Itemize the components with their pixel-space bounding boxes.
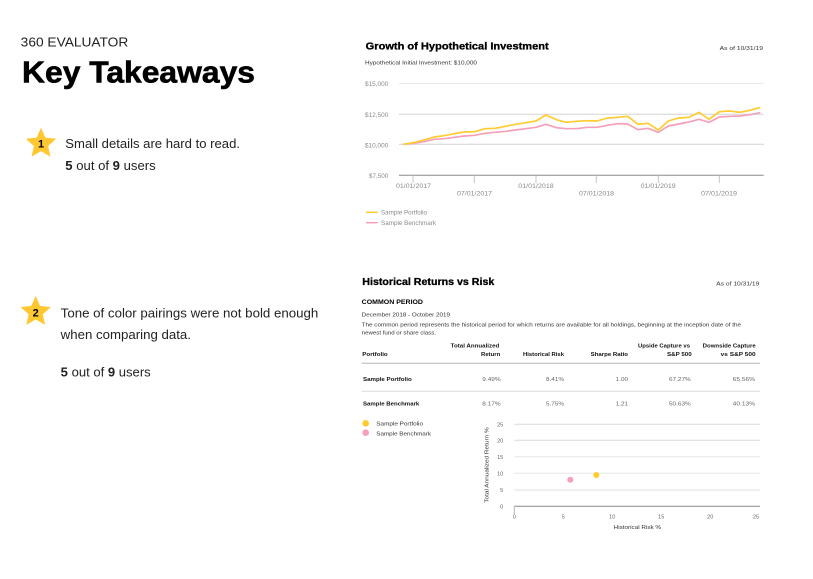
table header: Total Annualized [451,344,500,350]
x axis labels: 01/01/2017 [396,184,432,190]
scatter legend [362,420,431,437]
date range: December 2018 - October 2019 [362,313,450,319]
y axis labels [365,82,389,180]
panel: historical returns vs risk [362,277,760,531]
table row: sample portfolio: 65.56% [733,377,755,383]
y axis tick labels: 15 [497,455,503,461]
x axis labels: 07/01/2018 [579,192,615,198]
table header: vs S&P 500 [721,352,756,358]
x axis labels: 01/01/2018 [518,184,554,190]
data point: sample portfolio [593,472,599,478]
takeaway 1 [26,128,240,173]
table header: Downside Capture [703,344,756,350]
y axis labels: $15,000 [365,82,389,88]
takeaway 2 text: when comparing data. [60,327,191,342]
y axis tick labels: 25 [497,422,503,428]
chart legend [366,211,437,227]
takeaway 1 text: Small details are hard to read. [65,136,240,151]
table row: sample benchmark: 40.13% [733,402,755,408]
y axis tick labels: 10 [497,472,503,478]
table row: sample portfolio: Sample Portfolio [363,377,412,383]
table row: sample benchmark: 50.63% [669,402,691,408]
eyebrow label: 360 EVALUATOR [21,35,128,50]
x axis tick labels: 10 [609,514,615,520]
table header: Portfolio [362,352,388,358]
table row: sample portfolio: 67.27% [669,377,691,383]
data table [362,344,760,408]
x axis tick labels [513,514,759,520]
icon: star 1 [26,128,56,157]
as-of date: As of 10/31/19 [716,281,759,287]
table row: sample benchmark: Sample Benchmark [363,402,420,408]
table header: Historical Risk [523,352,565,358]
table row: sample portfolio: 9.49% [482,377,501,383]
y axis labels: $7,500 [369,174,389,180]
x axis tick labels: 5 [562,514,565,520]
x axis tick labels: 0 [513,514,516,520]
table row: sample benchmark: 1.21 [616,402,628,408]
y axis tick labels: 20 [497,438,503,444]
takeaway 2 text: Tone of color pairings were not bold enough [61,305,318,320]
data point: sample benchmark [567,477,573,483]
section heading: COMMON PERIOD [362,299,423,306]
x axis labels: 07/01/2017 [457,192,493,198]
x axis tick labels: 20 [707,514,713,520]
takeaway 2 [20,296,322,380]
y axis title: Total Annualized Return % [485,427,491,503]
title: Key Takeaways [22,54,255,89]
x axis labels [396,184,738,198]
takeaway 1 stat: 5 out of 9 users [65,158,156,173]
x axis labels: 01/01/2019 [641,184,676,190]
chart legend: Sample Portfolio [381,211,428,217]
table header: Sharpe Ratio [591,352,629,358]
takeaway 2 stat: 5 out of 9 users [61,365,151,380]
line chart [365,82,764,198]
x axis title: Historical Risk % [614,525,661,531]
icon: star 1: 1 [38,138,44,150]
panel: key takeaways [20,35,322,380]
y axis tick labels: 0 [500,504,503,510]
chart legend: Sample Benchmark [381,221,437,227]
table row: sample portfolio [363,377,755,383]
panel title: Historical Returns vs Risk [362,277,495,288]
y axis tick labels: 5 [500,488,503,494]
description: The common period represents the historical period for which returns are available for all holdings, beginning at the inception date of the [362,323,741,329]
chart title: Growth of Hypothetical Investment [366,41,549,52]
table row: sample portfolio: 8.41% [546,377,564,383]
y axis tick labels [497,422,503,510]
table row: sample portfolio: 1.00 [616,377,628,383]
x axis tick labels: 25 [753,514,759,520]
table row: sample benchmark [363,402,755,408]
y axis labels: $10,000 [365,143,389,149]
table header: Upside Capture vs [638,344,690,350]
x axis labels: 07/01/2019 [701,192,738,198]
table row: sample benchmark: 5.75% [546,402,564,408]
series: sample benchmark line [403,113,760,144]
table row: sample benchmark: 8.17% [482,402,501,408]
panel: growth of hypothetical investment [365,41,764,227]
scatter legend: Sample Portfolio [376,422,423,428]
subtitle: Hypothetical Initial Investment: $10,000 [365,61,477,67]
scatter chart [485,422,760,531]
description: newest fund or share class. [362,330,436,336]
x axis tick labels: 15 [658,514,664,520]
y axis labels: $12,500 [365,113,389,119]
table header: S&P 500 [667,352,692,358]
icon: star 2 [20,296,51,325]
table header: Return [481,352,501,358]
icon: star 2: 2 [33,308,39,320]
series: sample portfolio line [403,107,760,144]
scatter legend: Sample Benchmark [376,431,431,437]
table header [362,344,756,358]
as-of date: As of 10/31/19 [720,46,763,52]
